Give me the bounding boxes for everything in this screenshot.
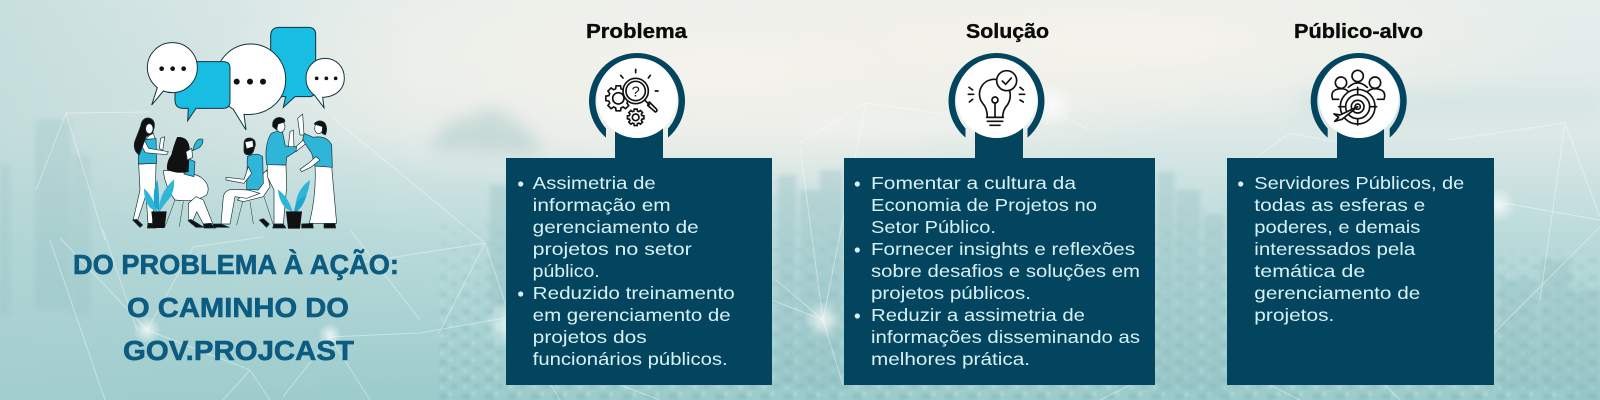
bullet list: Solução: Setor Público. (871, 217, 996, 237)
bullet list: Problema: projetos no setor (533, 239, 692, 259)
bullet list: Solução: Reduzir a assimetria de (871, 305, 1085, 325)
bubble dots (159, 66, 337, 85)
bullet list: Problema: Assimetria de (533, 173, 656, 193)
heading: Solução: Solução (966, 20, 1049, 43)
illustration: people talking with speech bubbles (133, 27, 344, 229)
bullet list: Público-alvo: poderes, e demais (1254, 217, 1421, 237)
bullet list: Público-alvo: gerenciamento de (1254, 283, 1420, 303)
person: standing man (266, 117, 297, 228)
bullet list: Problema: gerenciamento de (533, 217, 699, 237)
speech bubble: white right (306, 58, 344, 108)
panel: Problema (506, 158, 772, 385)
bullet list: Solução: Economia de Projetos no (871, 195, 1097, 215)
column: Público-alvo (1227, 20, 1494, 385)
person: standing woman (133, 118, 168, 228)
bullet list: Público-alvo: interessados pela (1254, 239, 1416, 259)
icon: gears and magnifier (597, 58, 677, 138)
person: seated woman (163, 137, 216, 228)
title: GOV.PROJCAST (123, 335, 354, 366)
bullet list: Problema: público. (533, 261, 600, 281)
bullet list: Público-alvo: Servidores Públicos, de (1254, 173, 1464, 193)
bullet list: Solução: Fomentar a cultura da (871, 173, 1076, 193)
bullet list: Problema: informação em (533, 195, 671, 215)
icon badge: arc and stem (1311, 53, 1407, 160)
bullet list: Problema: Reduzido treinamento (533, 283, 735, 303)
panel: Público-alvo (1227, 158, 1494, 385)
plant: left (144, 179, 174, 228)
bullet list: Solução: informações disseminando as (871, 327, 1140, 347)
bullet list: Solução: Fornecer insights e reflexões (871, 239, 1135, 259)
bullet list: Problema: funcionários públicos. (533, 349, 728, 369)
bullet list: Solução: melhores prática. (871, 349, 1030, 369)
bullet list: Solução: projetos públicos. (871, 283, 1031, 303)
bullet list: Público-alvo: projetos. (1254, 305, 1334, 325)
bullet list: Problema: em gerenciamento de (533, 305, 731, 325)
speech bubble: white left (147, 43, 197, 105)
bullet list: Solução (855, 173, 1140, 369)
speech bubble: medium blue (175, 62, 230, 121)
person: woman in skirt (296, 114, 337, 228)
bullet list: Público-alvo: temática de (1254, 261, 1365, 281)
icon: light bulb with check (956, 58, 1036, 138)
plant: right (278, 180, 310, 229)
heading: Problema: Problema (586, 20, 688, 43)
panel: Solução (844, 158, 1155, 385)
column: Solução (844, 20, 1155, 385)
speech bubble: large white (216, 44, 286, 130)
icon: audience target with arrow (1319, 58, 1399, 138)
heading: Público-alvo: Público-alvo (1294, 20, 1423, 43)
title (73, 249, 399, 366)
title: DO PROBLEMA À AÇÃO: (73, 249, 399, 280)
icon: gears and magnifier: ? (632, 84, 640, 100)
bullet list: Problema (518, 173, 735, 369)
person: bearded man seated (213, 138, 273, 227)
icon badge: arc and stem (948, 53, 1045, 160)
background: network lines (36, 81, 1600, 400)
bullet list: Público-alvo: todas as esferas e (1254, 195, 1425, 215)
bullet list: Problema: projetos dos (533, 327, 647, 347)
speech bubble: tall blue (271, 27, 316, 107)
bullet list: Público-alvo (1238, 173, 1464, 325)
column: Problema (506, 20, 772, 385)
title: O CAMINHO DO (127, 292, 349, 323)
bullet list: Solução: sobre desafios e soluções em (871, 261, 1140, 281)
icon badge: arc and stem (589, 53, 685, 160)
